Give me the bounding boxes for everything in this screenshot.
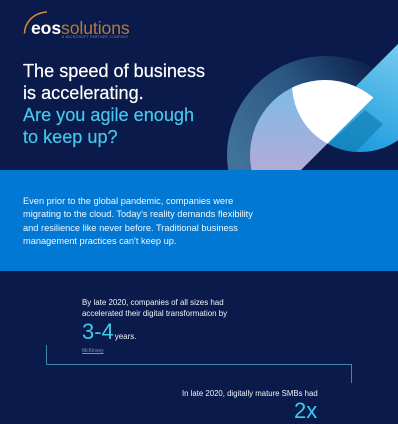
title [23, 61, 205, 148]
intro text: management practices can't keep up. [23, 236, 176, 246]
ring [227, 56, 373, 170]
logo arc [24, 11, 47, 34]
title: to keep up? [23, 127, 118, 147]
stat 1 number: 3-4years. [82, 319, 136, 344]
light inner circle [250, 80, 374, 170]
blue circle segment [328, 44, 398, 152]
intro text: migrating to the cloud. Today's reality demands flexibility [23, 209, 253, 219]
title: is accelerating. [23, 83, 144, 103]
logo [24, 11, 130, 39]
intro text: Even prior to the global pandemic, companies were [23, 196, 233, 206]
decorative graphic: overlapping circles [227, 44, 398, 170]
source link: McKinsey [82, 348, 104, 354]
stat 2 text: In late 2020, digitally mature SMBs had [182, 389, 318, 398]
stat 1 text: accelerated their digital transformation by [82, 309, 227, 318]
logo tagline: A MICROSOFT PARTNER COMPANY [62, 35, 129, 39]
title: The speed of business [23, 61, 205, 81]
intro text: and resilience like never before. Traditional business [23, 223, 238, 233]
connector line [46, 345, 352, 383]
logo wordmark: eossolutions [31, 18, 130, 38]
stat 2 number: 2x [294, 398, 317, 423]
white overlap [292, 80, 374, 144]
stat 1 text: By late 2020, companies of all sizes had [82, 298, 224, 307]
title: Are you agile enough [23, 105, 194, 125]
stat 1 text [82, 298, 228, 318]
intro band [0, 170, 398, 271]
intro text [23, 196, 253, 246]
shadow shape [328, 110, 383, 152]
